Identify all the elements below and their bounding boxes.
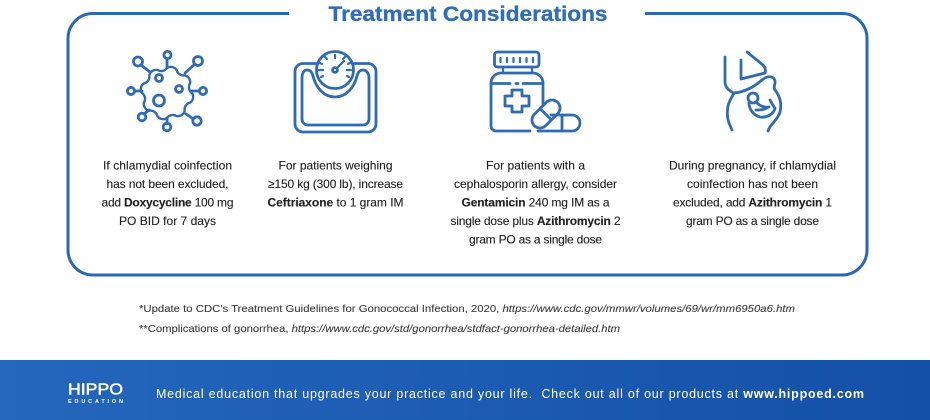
text: gentamicin note: cephalosporin allergy, consider bbox=[454, 177, 617, 191]
icon: virus bbox=[127, 51, 207, 131]
logo: hippo education: EDUCATION bbox=[68, 399, 123, 405]
text: gentamicin note: gram PO as a single dose bbox=[469, 232, 602, 246]
text: doxycycline note: has not been excluded, bbox=[106, 177, 228, 191]
text: doxycycline note: add Doxycycline 100 mg bbox=[102, 196, 234, 210]
tagline: Medical education that upgrades your practice and your life. Check out all of our products at www.hippoed.com bbox=[156, 387, 864, 401]
text: gentamicin note: For patients with a bbox=[486, 158, 585, 172]
icon: pregnant woman bbox=[725, 52, 781, 131]
text: gentamicin note: Gentamicin 240 mg IM as a bbox=[462, 196, 610, 210]
text: gentamicin note: single dose plus Azithromycin 2 bbox=[450, 214, 621, 228]
text: doxycycline note: PO BID for 7 days bbox=[119, 214, 216, 228]
text: pregnancy note: gram PO as a single dose bbox=[686, 214, 819, 228]
text: ceftriaxone note: ≥150 kg (300 lb), increase bbox=[268, 177, 403, 191]
footer banner bbox=[0, 360, 930, 420]
text: doxycycline note bbox=[102, 158, 234, 228]
logo: hippo education: HIPPO bbox=[68, 382, 123, 398]
footnote: treatment guidelines: *Update to CDC's Treatment Guidelines for Gonococcal Infection, 2020, https://www.cdc.gov/mmwr/volumes/69/wr/mm6950a6.htm bbox=[139, 304, 795, 315]
text: pregnancy note: coinfection has not been bbox=[687, 177, 818, 191]
text: pregnancy note bbox=[669, 158, 836, 228]
text: ceftriaxone note: For patients weighing bbox=[278, 158, 392, 172]
text: ceftriaxone note: Ceftriaxone to 1 gram IM bbox=[268, 196, 404, 210]
text: doxycycline note: If chlamydial coinfection bbox=[103, 158, 232, 172]
text: pregnancy note: excluded, add Azithromycin 1 bbox=[673, 196, 832, 210]
logo: hippo education bbox=[68, 382, 123, 405]
panel: treatment considerations frame bbox=[68, 14, 867, 275]
icon: medicine bottle and pills bbox=[491, 52, 580, 131]
title: Treatment Considerations bbox=[328, 3, 608, 26]
text: gentamicin note bbox=[450, 158, 621, 246]
footnote: complications: **Complications of gonorrhea, https://www.cdc.gov/std/gonorrhea/stdfact-gonorrhea-detailed.htm bbox=[139, 324, 620, 335]
icon: weighing scale bbox=[295, 52, 376, 132]
text: pregnancy note: During pregnancy, if chlamydial bbox=[669, 158, 836, 172]
text: ceftriaxone note bbox=[268, 158, 404, 210]
